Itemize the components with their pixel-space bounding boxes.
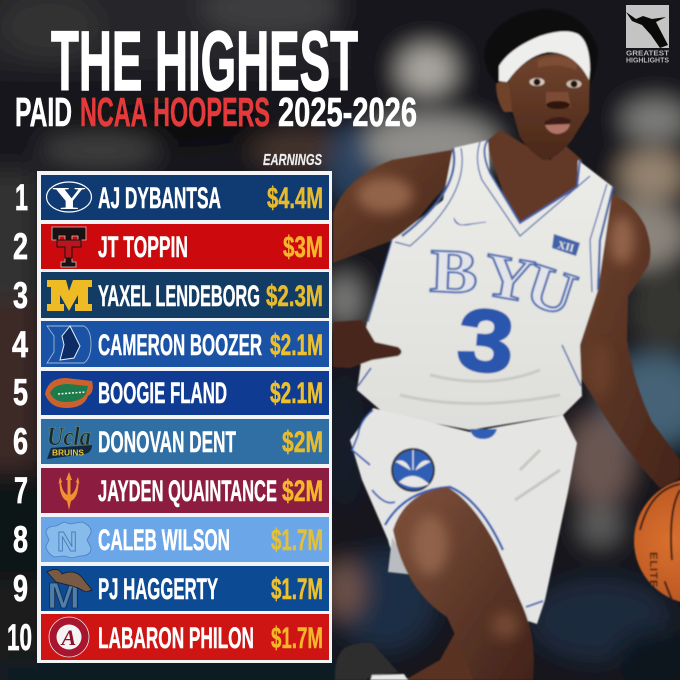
logo: Memphis tiger M bbox=[47, 569, 92, 616]
nike swoosh bbox=[454, 218, 486, 225]
row 9: PJ Haggerty: $1.7M bbox=[271, 573, 323, 606]
logo: Arizona State pitchfork bbox=[58, 472, 80, 510]
white shorts bbox=[350, 408, 577, 624]
row 9: PJ Haggerty: PJ HAGGERTY bbox=[98, 573, 218, 606]
row 2: JT Toppin: 2 bbox=[13, 226, 28, 267]
row 9: PJ Haggerty: 9 bbox=[13, 568, 28, 609]
row 1: AJ Dybantsa: $4.4M bbox=[267, 182, 323, 215]
back leg and shoe bbox=[335, 620, 490, 680]
row 2: JT Toppin: $3M bbox=[283, 231, 323, 264]
jersey number 3: 3 bbox=[454, 289, 518, 392]
row 5: Boogie Fland bbox=[13, 371, 329, 415]
orange basketball: ELITE bbox=[647, 552, 659, 588]
logo: Texas Tech bbox=[52, 227, 86, 267]
row 1: AJ Dybantsa: AJ DYBANTSA bbox=[98, 182, 221, 215]
shorts basketball logo bbox=[391, 448, 435, 492]
logo: Michigan M bbox=[47, 280, 92, 311]
BYU chest lettering: Y bbox=[478, 241, 539, 316]
leg highlights bbox=[412, 515, 519, 639]
title bbox=[15, 14, 417, 135]
arm highlights bbox=[357, 177, 634, 396]
row 8: Caleb Wilson: 8 bbox=[13, 519, 28, 560]
white headband bbox=[499, 31, 590, 82]
big 12 conference mark bbox=[552, 234, 580, 256]
row 10: LaBaron Philon: 10 bbox=[7, 617, 32, 658]
logo: Greatest Highlights bbox=[626, 5, 669, 64]
logo: BYU bbox=[46, 180, 92, 216]
row 5: Boogie Fland: BOOGIE FLAND bbox=[98, 377, 227, 410]
front leg bbox=[393, 487, 534, 680]
row 3: Yaxel Lendeborg: $2.3M bbox=[266, 280, 323, 313]
row 10: LaBaron Philon: $1.7M bbox=[271, 622, 323, 655]
BYU chest lettering bbox=[429, 237, 584, 330]
row 6: Donovan Dent: DONOVAN DENT bbox=[98, 426, 236, 459]
logo: Alabama A bbox=[49, 617, 89, 657]
row 4: Cameron Boozer: CAMERON BOOZER bbox=[98, 329, 262, 362]
row 9: PJ Haggerty bbox=[13, 566, 329, 616]
title line one: THE HIGHEST bbox=[51, 14, 358, 108]
row 8: Caleb Wilson: $1.7M bbox=[271, 524, 323, 557]
row 5: Boogie Fland: 5 bbox=[13, 372, 28, 413]
player dribbling in BYU uniform bbox=[333, 9, 680, 680]
earnings column heading: EARNINGS bbox=[263, 152, 322, 169]
row 6: Donovan Dent: 6 bbox=[13, 421, 28, 462]
row 10: LaBaron Philon bbox=[7, 614, 329, 660]
shorts Y waistband mark bbox=[470, 429, 497, 439]
row 6: Donovan Dent: $2M bbox=[282, 426, 323, 459]
logo: UCLA: BRUINS bbox=[52, 448, 85, 458]
row 1: AJ Dybantsa bbox=[15, 175, 329, 220]
logo: Greatest Highlights: HIGHLIGHTS bbox=[626, 56, 669, 64]
ranking table panel bbox=[7, 171, 332, 663]
row 7: Jayden Quaintance: JAYDEN QUAINTANCE bbox=[98, 475, 277, 508]
row 7: Jayden Quaintance: 7 bbox=[14, 470, 28, 511]
title line two: 2025-2026 bbox=[278, 89, 417, 135]
row 4: Cameron Boozer: 4 bbox=[12, 324, 28, 365]
logo: UCLA: Ucla bbox=[47, 422, 91, 451]
big 12 conference mark: XII bbox=[556, 239, 575, 255]
logo: BYU: Y bbox=[52, 180, 86, 216]
logo: Duke bbox=[47, 326, 91, 363]
BYU chest lettering: B bbox=[429, 237, 479, 307]
row 2: JT Toppin: JT TOPPIN bbox=[98, 231, 188, 264]
logo: Greatest Highlights: GREATEST bbox=[626, 48, 669, 58]
row 7: Jayden Quaintance bbox=[14, 468, 329, 513]
logo: Memphis tiger M: M bbox=[47, 575, 80, 616]
hair bbox=[485, 9, 598, 84]
row 4: Cameron Boozer: $2.1M bbox=[270, 329, 323, 362]
head and face bbox=[496, 54, 590, 160]
logo: North Carolina interlock bbox=[46, 522, 91, 558]
neck bbox=[486, 130, 582, 228]
row 7: Jayden Quaintance: $2M bbox=[282, 475, 323, 508]
hand with pointing thumb bbox=[333, 320, 402, 368]
logo: Alabama A: A bbox=[60, 625, 76, 650]
logo: North Carolina interlock: N bbox=[57, 526, 77, 557]
row 3: Yaxel Lendeborg: 3 bbox=[13, 275, 28, 316]
title line two: PAID bbox=[15, 89, 72, 135]
row 5: Boogie Fland: $2.1M bbox=[270, 377, 323, 410]
row 8: Caleb Wilson: CALEB WILSON bbox=[98, 524, 230, 557]
row 10: LaBaron Philon: LABARON PHILON bbox=[98, 622, 254, 655]
row 2: JT Toppin bbox=[13, 224, 329, 269]
row 6: Donovan Dent bbox=[13, 419, 329, 464]
row 8: Caleb Wilson bbox=[13, 517, 329, 562]
row 4: Cameron Boozer bbox=[12, 321, 329, 367]
row 1: AJ Dybantsa: 1 bbox=[15, 177, 28, 218]
logo: Florida gator bbox=[45, 378, 93, 408]
row 3: Yaxel Lendeborg: YAXEL LENDEBORG bbox=[98, 280, 260, 313]
white jersey bbox=[357, 140, 613, 430]
left arm bbox=[333, 150, 458, 263]
orange basketball bbox=[634, 478, 680, 604]
BYU chest lettering: U bbox=[518, 251, 584, 330]
row 3: Yaxel Lendeborg bbox=[13, 272, 329, 318]
right arm bbox=[572, 192, 680, 488]
title line two: NCAA HOOPERS bbox=[80, 89, 270, 135]
